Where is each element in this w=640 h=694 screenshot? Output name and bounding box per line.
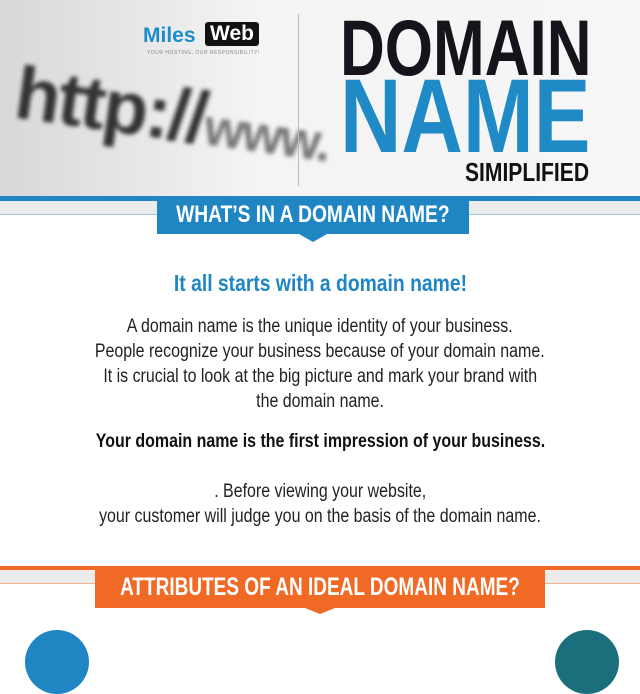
- closing text: [99, 481, 541, 527]
- closing text: your customer will judge you on the basis of the domain name.: [99, 506, 541, 527]
- title: DOMAIN: [340, 3, 591, 92]
- title: [340, 3, 591, 187]
- logo: [143, 22, 260, 56]
- title: NAME: [340, 58, 590, 175]
- blue band: [0, 196, 640, 201]
- paragraph: It is crucial to look at the big picture and mark your brand with: [103, 366, 537, 387]
- subheading: It all starts with a domain name!: [173, 270, 467, 296]
- paragraph: [95, 316, 545, 412]
- banner: attributes: [95, 570, 545, 614]
- icon circles partial: [25, 630, 89, 694]
- header background: [0, 0, 640, 197]
- bold line: Your domain name is the first impression of your business.: [95, 431, 545, 452]
- paragraph: People recognize your business because of your domain name.: [95, 341, 545, 362]
- logo: YOUR HOSTING, OUR RESPONSIBILITY!: [147, 50, 260, 56]
- logo: Miles: [143, 24, 196, 47]
- logo: Web: [210, 22, 254, 45]
- url blurred text: http://www.: [10, 51, 333, 173]
- banner: what's in a domain name: WHAT’S IN A DOMAIN NAME?: [176, 201, 450, 228]
- title: SIMIPLIFIED: [465, 157, 589, 187]
- banner: attributes: ATTRIBUTES OF AN IDEAL DOMAIN NAME?: [120, 573, 520, 601]
- closing text: . Before viewing your website,: [214, 481, 426, 502]
- paragraph: A domain name is the unique identity of your business.: [127, 316, 513, 337]
- divider: [298, 14, 299, 186]
- banner: what's in a domain name: [157, 201, 469, 242]
- orange band: [0, 566, 640, 570]
- paragraph: the domain name.: [256, 391, 384, 412]
